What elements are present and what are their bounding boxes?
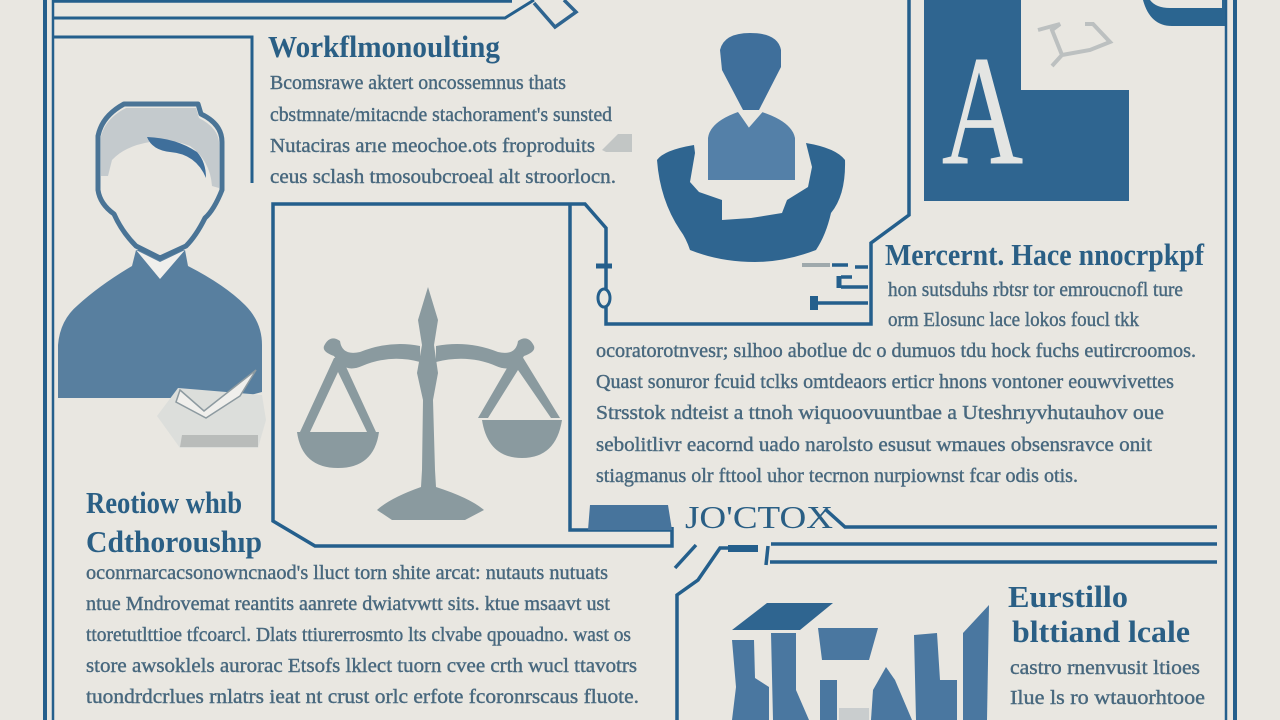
- heading: lower right: Eurstillo: [1008, 579, 1128, 614]
- heading: left: Cdthoroushıp: [86, 524, 262, 559]
- heading: left: [86, 485, 262, 559]
- text block: left: ttoretutlttioe tfcoarcl. Dlats ttiurerrosmto lts clvabe qpouadno. wast os: [86, 624, 631, 646]
- connector lines: lower right: [675, 509, 1217, 720]
- panel: letter A: A: [942, 24, 1023, 197]
- text block: right: orm Elosunc lace lokos foucl tkk: [888, 309, 1139, 331]
- heading: left: Reotiow whıb: [86, 485, 242, 520]
- text block: right: hon sutsduhs rbtsr tor emroucnofl ture: [888, 279, 1183, 301]
- text block: top: [270, 72, 616, 188]
- icon: hand and book: [157, 370, 266, 448]
- text block: left: [86, 562, 639, 708]
- chart: buildings: [732, 603, 989, 720]
- icon: person on bust: [657, 33, 845, 262]
- heading: mid right logo: JO'CTOX: [685, 499, 833, 535]
- text block: top: ceus sclash tmosoubcroeal alt stroorlocn.: [270, 166, 616, 188]
- heading: right: Mercernt. Hace nnocrpkpf: [885, 237, 1205, 272]
- blue tab: [588, 505, 672, 530]
- heading: top: Workflmonoulting: [268, 29, 500, 64]
- connector node: [728, 545, 758, 552]
- text block: top: Bcomsrawe aktert oncossemnus thats: [270, 72, 566, 94]
- text block: right: sebolitlivr eacornd uado narolsto esusut wmaues obsensravce onit: [596, 434, 1152, 456]
- heading: lower right: [1008, 579, 1190, 649]
- small note mark: [602, 134, 632, 152]
- text block: right: ocoratorotnvesr; sılhoo abotlue dc o dumuos tdu hock fuchs eutircroomos.: [596, 340, 1196, 362]
- text block: left: store awsoklels aurorac Etsofs lklect tuorn cvee crth wucl ttavotrs: [86, 655, 637, 677]
- text block: right: Quast sonuror fcuid tclks omtdeaors erticr hnons vontoner eouwvivettes: [596, 371, 1174, 393]
- text block: lower right: Ilue ls ro wtauorhtooe: [1010, 687, 1205, 709]
- text block: top: Nutaciras arıe meochoe.ots froproduits: [270, 135, 595, 157]
- text block: right: [596, 279, 1196, 487]
- text block: top: cbstmnate/mitacnde stachorament's sunsted: [270, 104, 612, 126]
- text block: right: stiagmanus olr fttool uhor tecrnon nurpiownst fcar odis otis.: [596, 465, 1078, 487]
- icon: scales of justice: [297, 287, 562, 520]
- panel: letter A: [924, 0, 1129, 201]
- icon: connector node: [596, 265, 868, 310]
- text block: right: Strsstok ndteist a ttnoh wiquoovuuntbae a Uteshrıyvhutauhov oue: [596, 402, 1164, 424]
- icon: grey arrow mark: [1038, 24, 1110, 66]
- text block: lower right: castro rnenvusit ltioes: [1010, 657, 1200, 679]
- top connector icon: [534, 0, 576, 27]
- text block: left: ntue Mndrovemat reantits aanrete dwiatvwtt sits. ktue msaavt ust: [86, 593, 610, 615]
- connector lines: right panel: [273, 0, 909, 546]
- top right tab: [1143, 0, 1225, 26]
- text block: lower right: [1010, 657, 1205, 709]
- text block: left: tuondrdcrlues rnlatrs ieat nt crust orlc erfote fcoronrscaus fluote.: [86, 686, 639, 708]
- panel outline: portrait: [54, 37, 252, 183]
- heading: lower right: blttiand lcale: [1012, 614, 1190, 649]
- icon: man portrait: [58, 104, 266, 448]
- text block: left: oconrnarcacsonowncnaod's lluct torn shite arcat: nutauts nutuats: [86, 562, 608, 584]
